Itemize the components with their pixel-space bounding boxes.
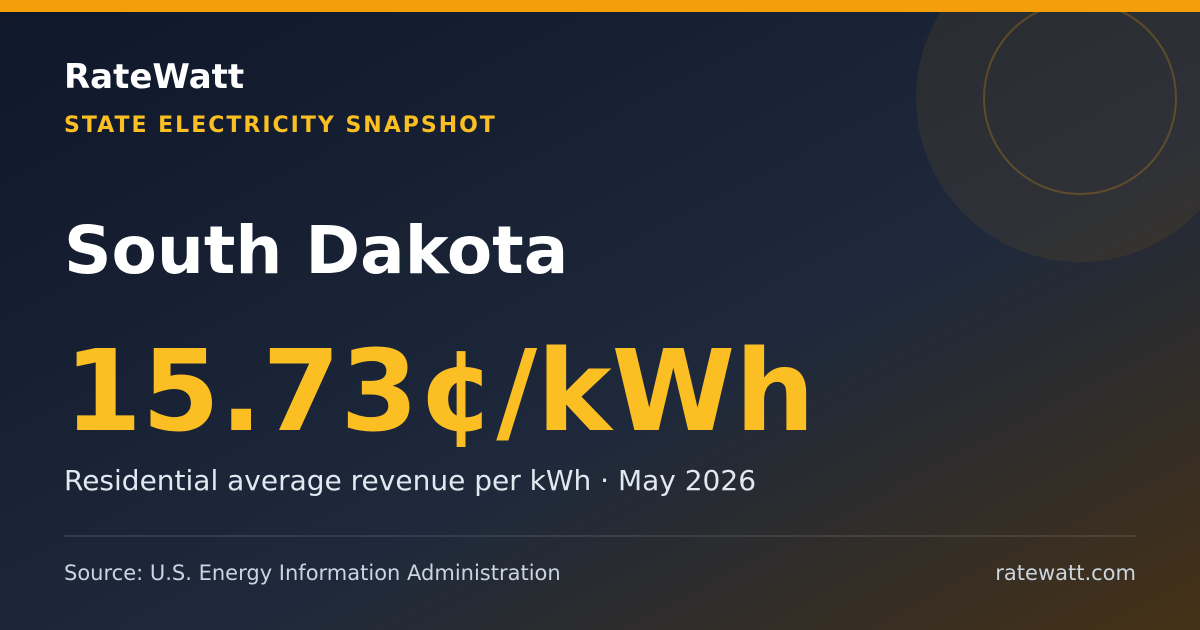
top accent bar xyxy=(0,0,1200,12)
divider xyxy=(64,535,1136,537)
description: Residential average revenue per kWh · May 2026 xyxy=(64,464,756,497)
state heading: South Dakota xyxy=(64,212,568,289)
source: Source: U.S. Energy Information Administration xyxy=(64,561,561,585)
subtitle: STATE ELECTRICITY SNAPSHOT xyxy=(64,113,497,138)
website: ratewatt.com xyxy=(995,561,1136,585)
brand name: RateWatt xyxy=(64,57,244,97)
price value: 15.73¢/kWh xyxy=(64,327,815,457)
